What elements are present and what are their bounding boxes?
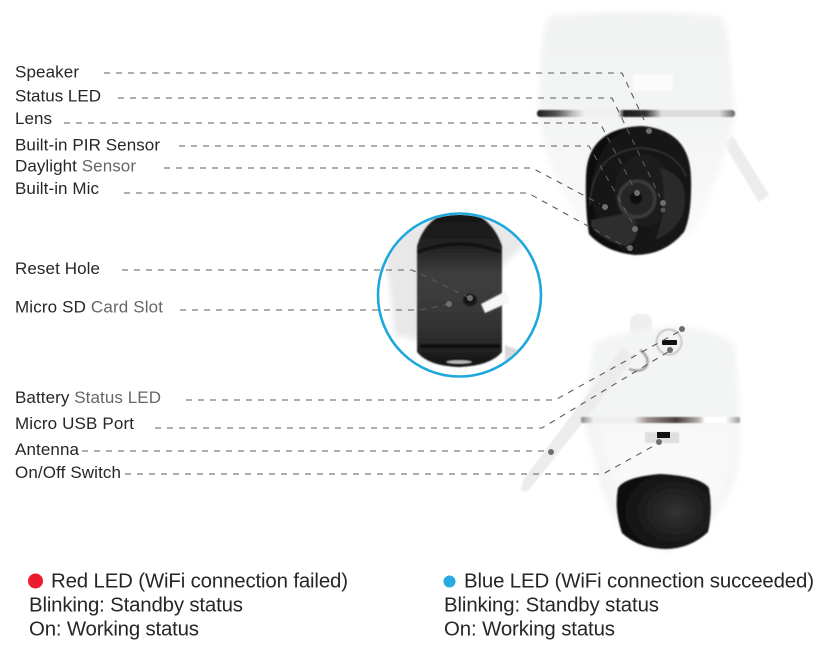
label: status led: Status LED (15, 86, 101, 106)
icon: blue dot (444, 576, 456, 588)
grey surroundings (386, 218, 522, 340)
label: built-in pir sensor: Built-in PIR Sensor (15, 136, 160, 154)
illustration: back view of camera (521, 314, 740, 551)
blue led on: On: Working status (444, 618, 615, 640)
labels: back view parts (15, 388, 161, 482)
white label patch (633, 74, 673, 91)
legend: red led (28, 570, 348, 640)
usb port ring (656, 330, 682, 354)
label: built-in mic: Built-in Mic (15, 179, 100, 198)
icon: red dot (28, 574, 43, 588)
label: antenna: Antenna (15, 440, 80, 459)
label: lens: Lens (15, 109, 52, 128)
label: reset hole: Reset Hole (15, 259, 100, 278)
blue led blinking: Blinking: Standby status (444, 594, 659, 616)
knob on top (630, 314, 652, 336)
silver ring (537, 110, 735, 117)
label: micro usb port: Micro USB Port (15, 414, 134, 433)
camera body: upper housing and dome (538, 12, 735, 256)
lower dome highlight (600, 425, 735, 548)
label: daylight sensor: Daylight Sensor (15, 156, 136, 176)
label: on/off switch: On/Off Switch (15, 463, 121, 482)
bottom highlight (446, 360, 472, 364)
labels: inset parts (15, 259, 163, 316)
black dome lens (617, 474, 711, 549)
labels: front view parts (15, 62, 160, 198)
micro usb port (662, 340, 677, 345)
lens centre (630, 192, 642, 204)
dark housing (417, 213, 502, 367)
label: battery status led: Battery Status LED (15, 388, 161, 407)
leader lines (64, 73, 685, 474)
camera body: back housing (584, 326, 740, 551)
inset photo content (386, 215, 522, 368)
antenna: back camera (521, 348, 636, 491)
red led on: On: Working status (29, 618, 199, 640)
head lower panel (591, 212, 637, 246)
antenna: front camera (722, 136, 769, 202)
white cable (481, 291, 510, 313)
silver ring (581, 417, 740, 423)
curved hook (629, 350, 648, 371)
on off switch (657, 432, 670, 438)
head inner ring (590, 148, 686, 205)
right head highlight (655, 168, 685, 240)
legend: blue led (444, 570, 814, 640)
label: speaker: Speaker (15, 62, 79, 82)
slot detail (463, 294, 477, 306)
switch panel (645, 432, 679, 443)
blue led heading: Blue LED (WiFi connection succeeded) (464, 570, 814, 592)
housing rim (418, 244, 500, 252)
black lens head (586, 126, 691, 255)
illustration: zoomed circular inset of camera underside (378, 211, 545, 376)
grey strap (504, 345, 518, 361)
blue circle outline (378, 214, 541, 376)
status LEDs (660, 208, 666, 212)
housing lower band (420, 344, 500, 348)
red led blinking: Blinking: Standby status (29, 594, 243, 616)
label: micro sd card slot: Micro SD Card Slot (15, 298, 163, 316)
illustration: front view of camera (537, 12, 769, 256)
lens (619, 181, 655, 217)
red led heading: Red LED (WiFi connection failed) (51, 570, 348, 592)
